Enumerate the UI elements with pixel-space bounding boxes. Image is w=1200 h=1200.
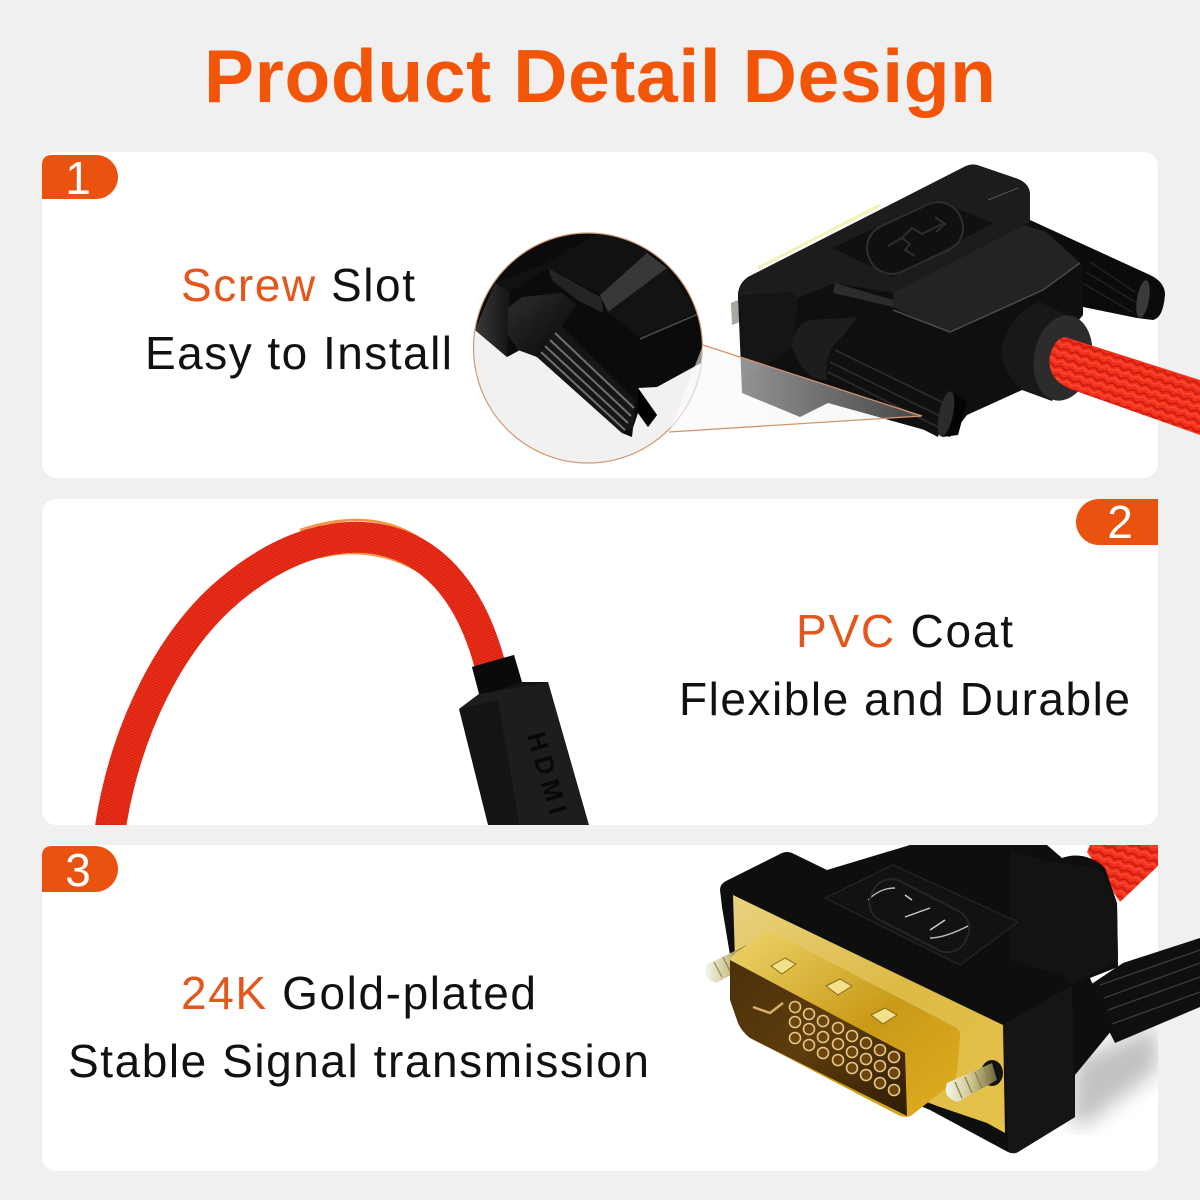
red braided cable with HDMI plug — [110, 520, 590, 830]
panel: PVC coat — [42, 496, 1158, 830]
logo on rear housing — [859, 194, 971, 282]
text: gold plated: 24K Gold-plated — [181, 967, 536, 1019]
number tab 3: 3 — [65, 844, 91, 896]
text: gold plated — [68, 967, 649, 1087]
number tab 3 — [42, 844, 118, 896]
panel: screw slot — [42, 152, 1200, 478]
HDMI plug: HDMI — [521, 728, 573, 817]
text: PVC coat — [679, 605, 1130, 725]
magnifier inset — [470, 230, 710, 466]
number tab 1: 1 — [65, 152, 91, 204]
title: Product Detail Design — [204, 34, 996, 118]
square contact holes — [771, 958, 897, 1024]
text: screw slot: Easy to Install — [145, 327, 452, 379]
panel: gold plated — [42, 844, 1200, 1171]
text: PVC coat: Flexible and Durable — [679, 673, 1130, 725]
text: screw slot — [145, 259, 452, 379]
HDMI plug — [459, 655, 590, 829]
cable collar — [1002, 302, 1099, 405]
rear thumb screw — [1030, 220, 1165, 320]
rear thumb screw — [1087, 938, 1200, 1043]
gold shell — [730, 933, 960, 1117]
number tab 2: 2 — [1107, 496, 1133, 548]
text: PVC coat: PVC Coat — [796, 605, 1013, 657]
number tab 1 — [42, 152, 118, 204]
number tab 2 — [1076, 496, 1158, 548]
left thumb screw tip — [705, 945, 750, 983]
front thumb screw — [792, 317, 967, 438]
callout lines — [669, 345, 922, 432]
text: gold plated: Stable Signal transmission — [68, 1035, 649, 1087]
pin holes — [790, 1002, 900, 1096]
right thumb screw tip — [946, 1060, 1003, 1102]
text: screw slot: Screw Slot — [181, 259, 415, 311]
connector: DVI rear with red cable — [731, 164, 1200, 438]
small screw tail — [731, 300, 740, 325]
red braided cable — [1049, 337, 1200, 435]
logo on gold plug housing — [863, 872, 976, 959]
connector: DVI gold plug — [705, 845, 1200, 1153]
callout wedge over connector — [669, 345, 922, 432]
